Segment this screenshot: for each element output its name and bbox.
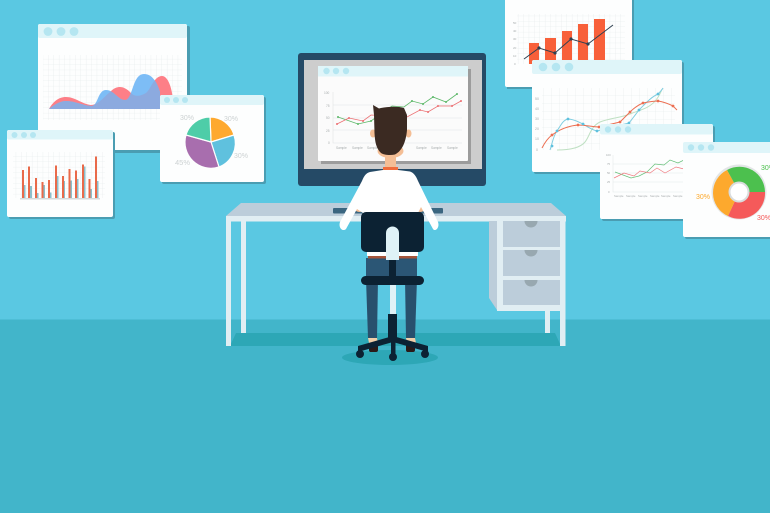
line chart axis labels: Sample <box>638 194 648 198</box>
hands <box>355 206 424 212</box>
desk drawers <box>489 221 565 311</box>
screen axis labels: Sample <box>447 146 458 150</box>
chair stem <box>390 285 396 315</box>
column chart axis labels: 40 <box>513 29 517 33</box>
screen axis labels: 50 <box>326 116 330 120</box>
column chart axis labels: 50 <box>513 21 517 25</box>
person legs <box>366 258 417 352</box>
panel: curve chart window <box>532 60 684 174</box>
screen axis labels: Sample <box>352 146 363 150</box>
panel: line chart window <box>600 124 715 221</box>
panel: area chart window <box>38 24 190 153</box>
pie labels: 30% <box>234 153 248 160</box>
pie labels: 30% <box>180 115 194 122</box>
chair connector <box>389 260 396 277</box>
collar <box>383 167 398 170</box>
pie labels: 45% <box>175 158 190 167</box>
curve chart axis labels: 0 <box>536 148 538 152</box>
column chart axis labels: 20 <box>513 46 517 50</box>
curve chart axis labels <box>535 97 539 152</box>
line chart axis labels: 50 <box>607 171 611 175</box>
monitor <box>298 53 486 186</box>
panel: pie chart window <box>160 95 266 184</box>
curve chart axis labels: 40 <box>535 107 539 111</box>
desk <box>226 203 566 346</box>
area chart <box>49 74 173 109</box>
shirt and arms <box>340 170 438 230</box>
chair column <box>388 314 397 340</box>
line chart axis labels: Sample <box>614 194 624 198</box>
background wall <box>0 0 770 320</box>
pie chart <box>185 117 235 168</box>
line chart axis labels: 0 <box>608 190 610 194</box>
curve chart axis labels: 50 <box>535 97 539 101</box>
curve chart axis labels: 10 <box>535 137 539 141</box>
donut chart <box>712 164 766 220</box>
line chart axis labels: Sample <box>626 194 636 198</box>
chair seat <box>361 276 424 285</box>
line chart <box>614 160 684 178</box>
bar chart <box>20 156 100 200</box>
chair base <box>356 336 429 361</box>
screen axis labels: Sample <box>431 146 442 150</box>
column chart axis labels: 0 <box>514 62 516 66</box>
line chart axis labels <box>606 153 683 198</box>
screen axis labels: 75 <box>326 104 330 108</box>
column chart axis labels: 30 <box>513 37 517 41</box>
line chart axis labels: 75 <box>607 162 611 166</box>
hair <box>373 105 407 155</box>
line chart axis labels: Sample <box>673 194 683 198</box>
line chart axis labels: 25 <box>607 180 611 184</box>
screen axis labels <box>324 91 458 150</box>
column chart <box>524 19 613 64</box>
floor shadow under desk <box>230 333 561 346</box>
curve chart <box>542 88 677 150</box>
column chart axis labels <box>513 21 517 66</box>
panel: upper right column chart window <box>505 0 634 89</box>
curve chart axis labels: 20 <box>535 127 539 131</box>
panel: bar chart window <box>7 130 115 219</box>
screen axis labels: Sample <box>336 146 347 150</box>
screen axis labels: 25 <box>326 129 330 133</box>
belt <box>368 256 417 258</box>
screen axis labels: 100 <box>324 91 330 95</box>
pie labels <box>175 115 248 167</box>
panel: donut chart window <box>683 142 770 239</box>
line chart axis labels: 100 <box>606 153 611 157</box>
pie labels: 30% <box>224 116 238 123</box>
donut labels <box>696 165 770 222</box>
screen line chart <box>336 93 462 125</box>
screen axis labels: Sample <box>416 146 427 150</box>
curve chart axis labels: 30 <box>535 117 539 121</box>
chair back support <box>386 227 399 260</box>
column chart axis labels: 10 <box>513 54 517 58</box>
screen axis labels: Sample <box>367 146 378 150</box>
keyboard <box>333 208 443 214</box>
donut labels: 30% <box>696 194 710 201</box>
screen axis labels: 0 <box>328 141 330 145</box>
person and chair <box>340 105 438 361</box>
floor <box>0 320 770 513</box>
neck and ears <box>370 130 412 169</box>
shirt hem <box>367 252 418 256</box>
line chart axis labels: Sample <box>661 194 671 198</box>
line chart axis labels: Sample <box>650 194 660 198</box>
chair shadow <box>342 350 438 365</box>
screen window <box>318 66 471 164</box>
chair back <box>361 212 424 252</box>
